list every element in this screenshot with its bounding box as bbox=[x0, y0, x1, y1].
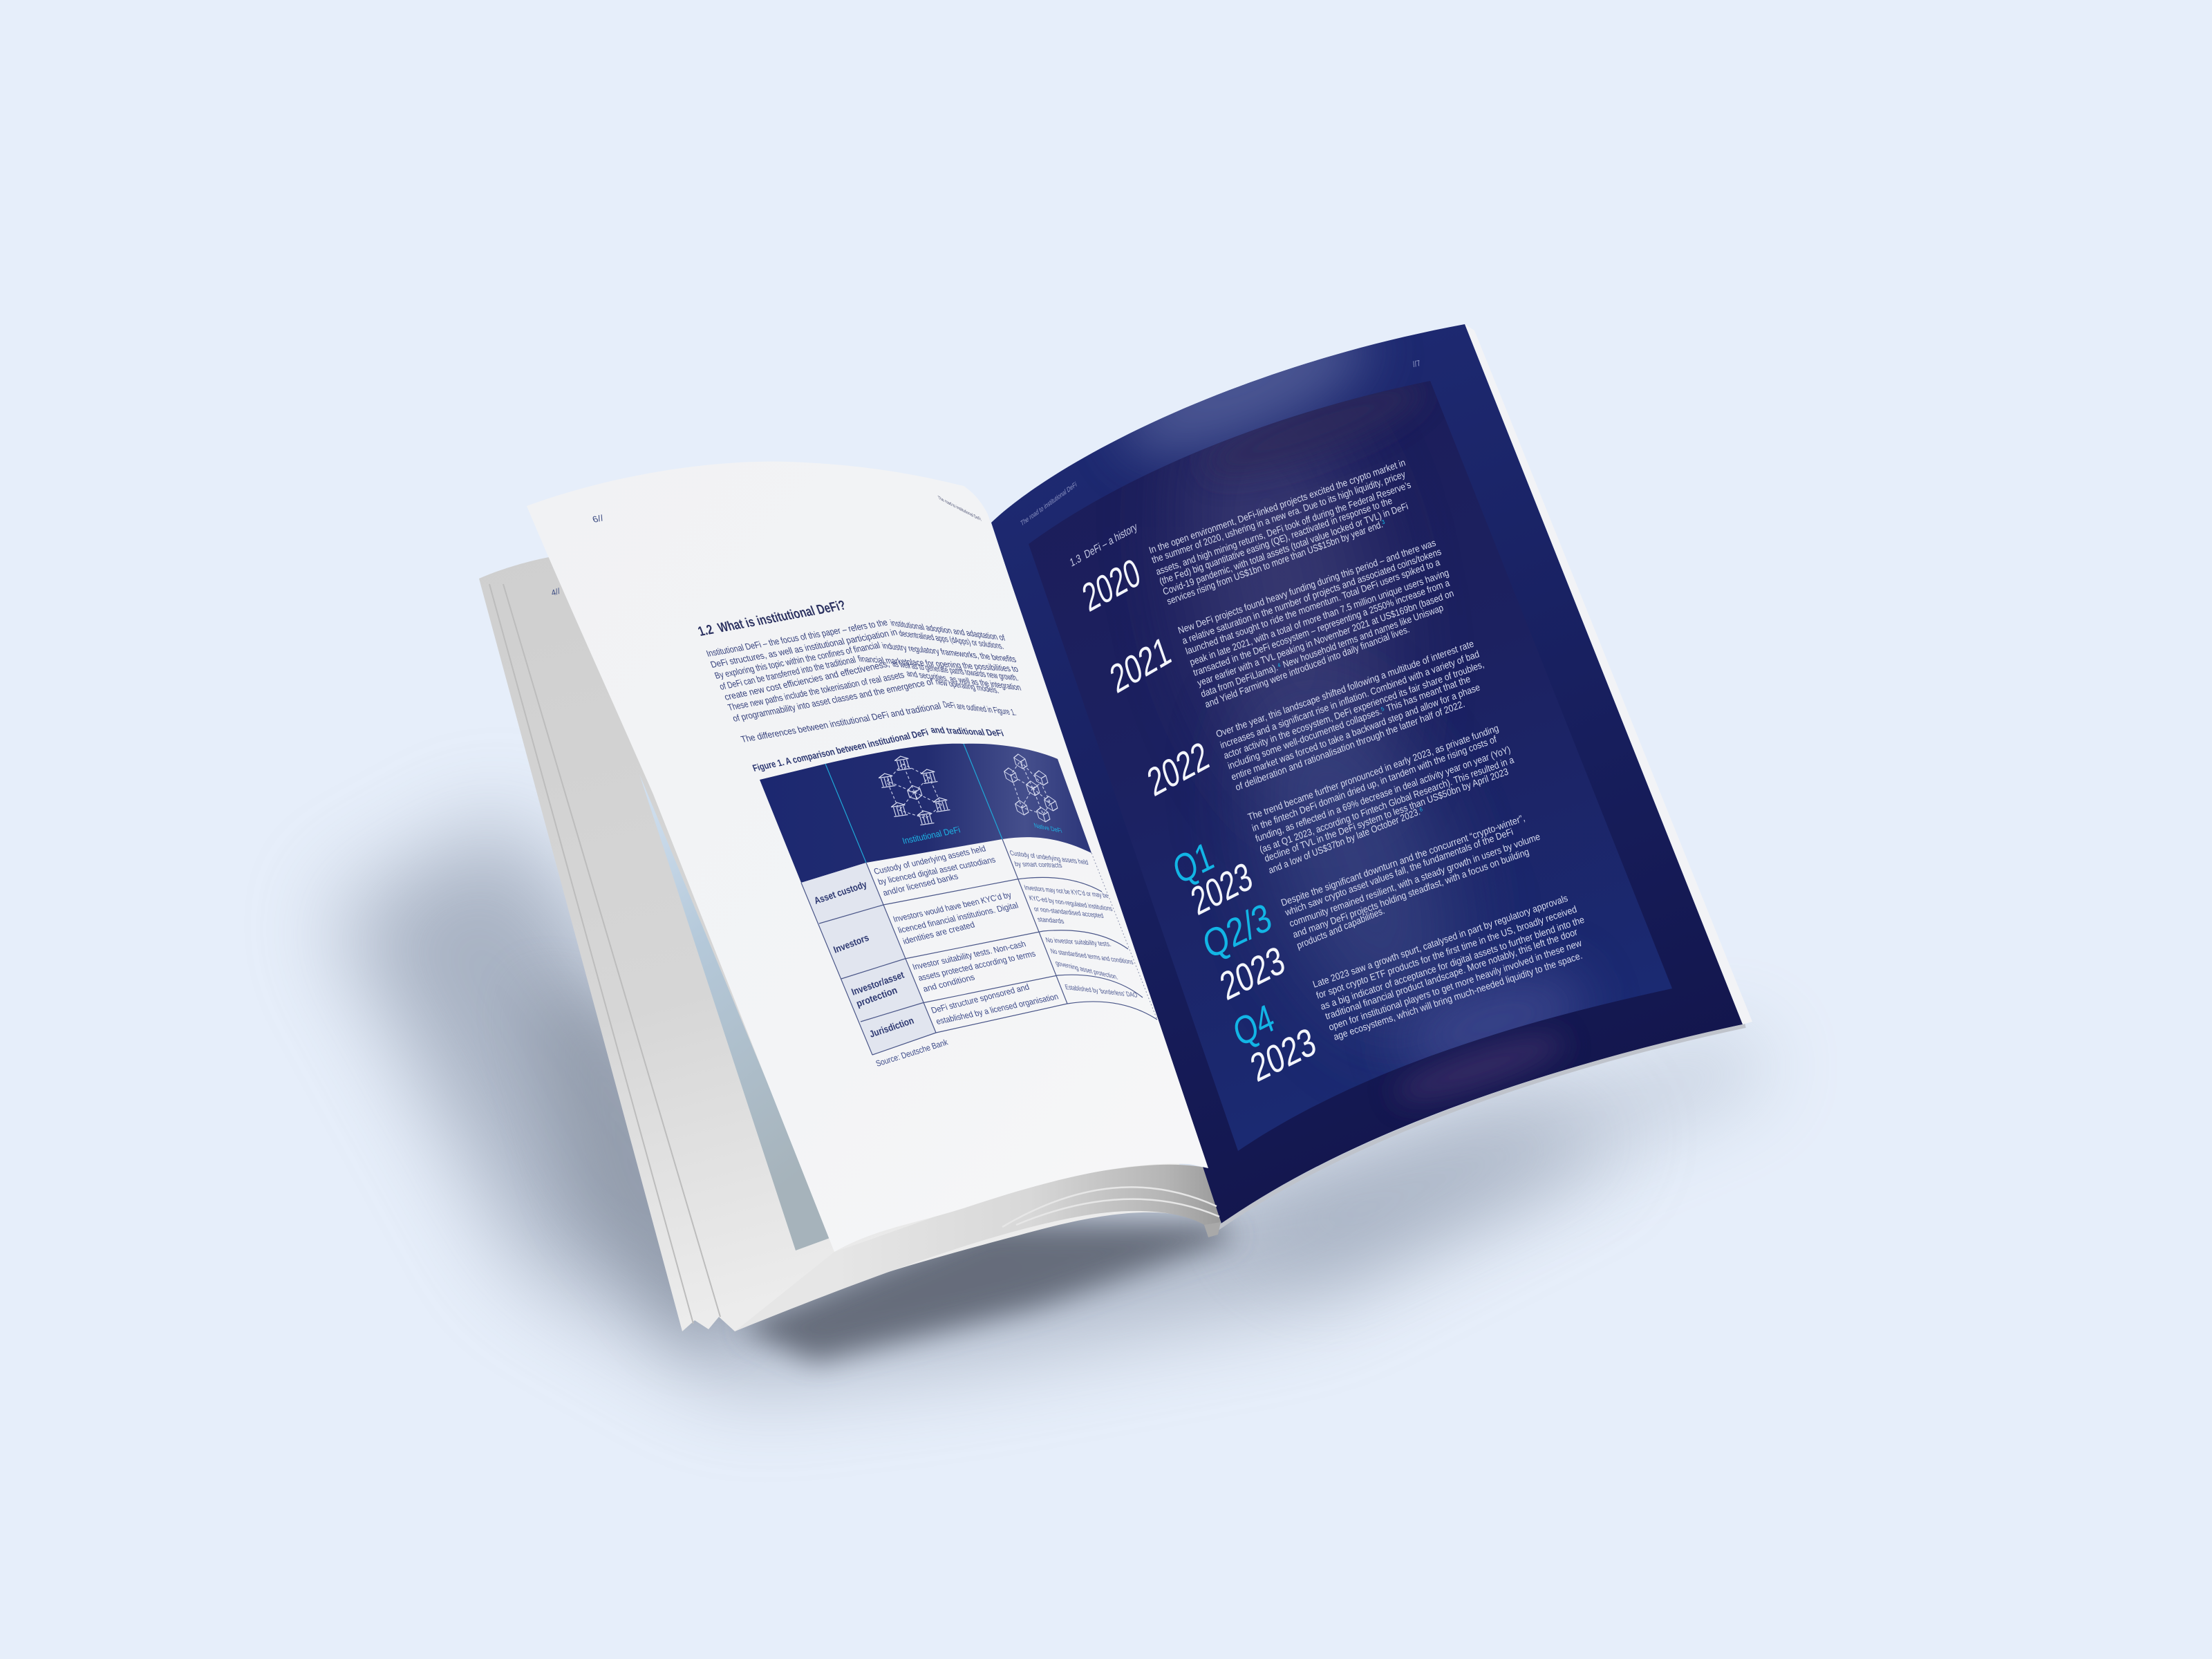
native DeFi column text: Investors may not be KYC’d or may be bbox=[1023, 883, 1109, 900]
gap showing blue-grey page bbox=[639, 774, 832, 1250]
paragraph: Q1 2023: (as at Q1 2023, according to Fintech Global Research). This resulted in a bbox=[1258, 755, 1516, 856]
paragraph: 2022: of deliberation and rationalisation through the latter half of 2022. bbox=[1234, 699, 1466, 794]
paragraph: 2021: launched that sought to ride the momentum. Total DeFi users spiked to a bbox=[1184, 557, 1442, 657]
paragraph: Q2/3 2023: and many DeFi projects holding steadfast, with a focus on building bbox=[1291, 847, 1530, 941]
paragraph: Q4 2023: Late 2023 saw a growth spurt, catalysed in part by regulatory approvals bbox=[1311, 893, 1569, 991]
table: comparison bbox=[760, 744, 1157, 1055]
body text: and securities, as well as the integration bbox=[905, 668, 1022, 693]
native DeFi column text: No standardised terms and conditions bbox=[1049, 947, 1134, 966]
native DeFi column text: No investor suitability tests. bbox=[1045, 937, 1112, 948]
source note: Source: Deutsche Bank bbox=[874, 1037, 950, 1069]
institutional DeFi column text: and/or licensed banks bbox=[881, 872, 959, 898]
page block under left page bbox=[735, 1165, 1225, 1331]
paragraph: 2021 bbox=[1177, 538, 1455, 711]
section heading: 1.2 What is institutional DeFi? bbox=[696, 598, 848, 639]
body text: financial marketplace for opening the possibilities to bbox=[856, 654, 1020, 674]
inner dark panel bbox=[1029, 381, 1672, 1151]
paragraph: 2022 bbox=[1215, 639, 1485, 794]
institutional DeFi column text: Investors would have been KYC’d by bbox=[892, 890, 1013, 924]
paragraph: 2022: increases and a significant rise in inflation. Combined with a variety of bad bbox=[1219, 649, 1481, 751]
icon: institutional DeFi network bbox=[878, 755, 950, 825]
year: 2021: 2021 bbox=[1105, 628, 1176, 702]
body text: decentralised apps (dApps) or solutions. bbox=[897, 628, 1005, 651]
paragraph: Q4 2023: open for institutional players to get more heavily involved in these new bbox=[1327, 938, 1584, 1033]
figure title: and traditional DeFi bbox=[928, 724, 1005, 738]
paragraph: 2020 bbox=[1147, 458, 1412, 608]
row labels: Investors bbox=[832, 932, 870, 956]
body text: institutional adoption and adaptation of bbox=[889, 618, 1006, 643]
running header: The road to institutional DeFi bbox=[1020, 480, 1078, 528]
running header: The road to institutional DeFi bbox=[937, 494, 982, 523]
paragraph: 2020: services rising from US$1bn to more than US$15bn by year end.³ bbox=[1165, 518, 1387, 608]
row labels: Jurisdiction bbox=[868, 1015, 915, 1040]
paragraph: 2020: In the open environment, DeFi-linked projects excited the crypto market in bbox=[1147, 458, 1407, 556]
column label: Institutional DeFi: Institutional DeFi bbox=[901, 825, 962, 846]
native DeFi column text: standards bbox=[1037, 916, 1065, 926]
page number: //7 bbox=[1412, 358, 1422, 369]
paragraph: Q2/3 2023: Despite the significant downturn and the concurrent “crypto-winter”, bbox=[1280, 813, 1526, 909]
paragraph: Q1 2023: in the fintech DeFi domain dried up, in tandem with the rising costs of bbox=[1250, 734, 1499, 834]
native DeFi column text bbox=[1009, 849, 1138, 1000]
year: Q4 2023: Q4 bbox=[1228, 995, 1280, 1056]
body text: of DeFi can be transferred into the traditional bbox=[718, 655, 857, 692]
paragraph: 2022: Over the year, this landscape shifted following a multitude of interest rate bbox=[1215, 639, 1475, 740]
institutional DeFi column text bbox=[872, 844, 1060, 1027]
institutional DeFi column text: licenced financial institutions. Digital bbox=[897, 901, 1020, 935]
institutional DeFi column text: and conditions bbox=[921, 973, 976, 994]
paragraph: Q1 2023: funding, as reflected in a 69% decrease in deal activity year on year (YoY) bbox=[1254, 744, 1512, 845]
row labels: Investor/asset bbox=[850, 970, 906, 998]
page number: 6// bbox=[591, 513, 605, 525]
panel: left page, institutional DeFi bbox=[527, 462, 1208, 1252]
row label column bbox=[801, 863, 936, 1055]
right page edge bbox=[1465, 324, 1752, 1024]
icon: native DeFi network bbox=[1003, 753, 1058, 823]
year: Q4 2023 bbox=[1228, 995, 1321, 1091]
body text: Institutional DeFi – the focus of this paper – refers to the bbox=[705, 617, 889, 659]
year: Q1 2023 bbox=[1168, 833, 1257, 924]
bottom cover edge bbox=[1217, 1026, 1745, 1229]
paragraph: 2021: transacted in the DeFi ecosystem – representing a 2550% increase from a bbox=[1192, 578, 1452, 679]
paragraph: Q1 2023: and a low of US$37bn by late October 2023.⁶ bbox=[1267, 805, 1425, 877]
paragraph: Q4 2023: traditional financial product landscape. More notably, this left the door bbox=[1324, 927, 1579, 1022]
paragraph: Q4 2023: age ecosystems, which will bring much-needed liquidity to the space. bbox=[1332, 950, 1584, 1043]
native DeFi column text: Established by ‘borderless’ DAO bbox=[1064, 983, 1138, 1000]
institutional DeFi column text: Investor suitability tests. Non-cash bbox=[911, 939, 1027, 972]
body text: of programmability into asset classes and the emergence of bbox=[731, 677, 935, 724]
paragraph: 2022: including some well-documented collapses.⁵ This has meant that the bbox=[1226, 674, 1472, 772]
paragraph: Q1 2023 bbox=[1246, 723, 1516, 877]
section heading: 1.3 DeFi – a history bbox=[1068, 520, 1138, 570]
paragraph: 2021: year earlier with a TVL peaking in November 2021 at US$169bn (based on bbox=[1196, 588, 1455, 689]
body text: These new paths include the tokenisation of real assets bbox=[727, 670, 906, 713]
paragraph: 2022: actor activity in the ecosystem, DeFi experienced its fair share of troubles, bbox=[1222, 659, 1485, 762]
paragraph: 2021: peak in late 2021, with a total of more than 7.5 million unique users having bbox=[1188, 568, 1450, 668]
body text: DeFi are outlined in Figure 1. bbox=[941, 700, 1018, 718]
native DeFi column text: governing asset protection. bbox=[1054, 959, 1119, 982]
native DeFi column text: by smart contracts bbox=[1014, 861, 1063, 870]
paragraph: 2020: assets, and high mining returns, DeFi took off during the Federal Reserve’s bbox=[1154, 480, 1412, 578]
panel: right page, DeFi history bbox=[991, 293, 1745, 1229]
spine foot bbox=[1204, 1222, 1221, 1237]
body text: new operating models. bbox=[934, 677, 1000, 695]
paragraph: Q2/3 2023: products and capabilities. bbox=[1295, 906, 1386, 952]
figure title: Figure 1. A comparison between institutional DeFi bbox=[751, 727, 930, 774]
body text: The differences between institutional DeFi and traditional bbox=[740, 701, 942, 744]
paragraph: Q2/3 2023 bbox=[1280, 813, 1541, 952]
institutional DeFi column text: by licenced digital asset custodians bbox=[877, 855, 997, 887]
institutional DeFi column text: Custody of underlying assets held bbox=[872, 844, 987, 877]
row labels: Asset custody bbox=[813, 879, 868, 907]
paragraph: Q4 2023 bbox=[1311, 893, 1586, 1043]
institutional DeFi column text: identities are created bbox=[901, 920, 976, 946]
paragraph: Q2/3 2023: community remained resilient, with a steady growth in users by volume bbox=[1288, 832, 1541, 930]
year: Q2/3 2023 bbox=[1197, 894, 1290, 1009]
paragraph: Q4 2023: for spot crypto ETF products for the first time in the US, broadly received bbox=[1315, 904, 1578, 1002]
year: Q2/3 2023: 2023 bbox=[1215, 937, 1290, 1009]
native DeFi column text: KYC-ed by non-regulated institutions bbox=[1028, 894, 1114, 913]
paragraph: 2020: (the Fed) big quantitative easing (QE), reactivated in response to the bbox=[1158, 496, 1394, 588]
row labels bbox=[813, 879, 915, 1040]
native DeFi column text: or non-standardised accepted bbox=[1033, 905, 1105, 920]
paragraph: Q4 2023: as a big indicator of acceptance for digital assets to further blend into the bbox=[1319, 915, 1586, 1013]
native DeFi column text: Custody of underlying assets held bbox=[1009, 849, 1089, 867]
institutional DeFi column text: established by a licensed organisation bbox=[935, 992, 1060, 1027]
year: 2022: 2022 bbox=[1142, 733, 1214, 805]
page number on back page: 4// bbox=[550, 586, 561, 598]
paragraph: 2021: data from DeFiLlama).⁴ New household terms and names like Uniswap bbox=[1199, 603, 1445, 700]
body text bbox=[705, 617, 1022, 744]
book shadow bbox=[332, 816, 1770, 1382]
paragraph: 2020: Covid-19 pandemic, with total assets (total value locked or TVL) in DeFi bbox=[1161, 501, 1409, 598]
institutional DeFi column text: DeFi structure sponsored and bbox=[930, 982, 1031, 1015]
year: Q2/3 2023: Q2/3 bbox=[1197, 894, 1277, 968]
back pages of the book bbox=[479, 556, 1211, 1331]
body text: DeFi structures, as well as institutional participation in bbox=[709, 627, 899, 670]
year: Q4 2023: 2023 bbox=[1245, 1019, 1321, 1091]
curled page edges at the spine bbox=[1002, 1187, 1219, 1227]
body text: industry regulatory frameworks, the benefits bbox=[881, 641, 1018, 664]
year: Q1 2023: 2023 bbox=[1185, 854, 1257, 924]
body text: By exploring this topic within the confines of financial bbox=[713, 640, 881, 681]
year: Q1 2023: Q1 bbox=[1168, 833, 1219, 893]
year: 2020: 2020 bbox=[1077, 550, 1145, 620]
body text: create new cost efficiencies and effectiveness, bbox=[723, 659, 891, 702]
paragraph: 2022: entire market was forced to take a backward step and allow for a phase bbox=[1230, 682, 1481, 783]
paragraph: 2021: New DeFi projects found heavy funding during this period – and there was bbox=[1177, 538, 1437, 637]
paragraph: Q1 2023: The trend became further pronounced in early 2023, as private funding bbox=[1246, 723, 1500, 823]
row labels: protection bbox=[855, 985, 899, 1010]
body text: as well as to generate paths towards new growth. bbox=[890, 659, 1020, 683]
institutional DeFi column text: assets protected according to terms bbox=[917, 949, 1037, 983]
paragraph: Q1 2023: decline of TVL in the DeFi system to less than US$50bn by April 2023 bbox=[1263, 767, 1510, 865]
column label: Native DeFi: Native DeFi bbox=[1033, 822, 1063, 835]
table header band bbox=[760, 744, 1091, 883]
paragraph: 2021: and Yield Farming were introduced into daily financial lives. bbox=[1203, 624, 1411, 711]
paragraph: 2020: the summer of 2020, ushering in a new era. Due to its high liquidity, pricey bbox=[1150, 469, 1407, 566]
paragraph: Q2/3 2023: which saw crypto asset values fall, the fundamentals of the DeFi bbox=[1284, 827, 1515, 919]
paragraph: 2021: a relative saturation in the number of projects and associated coins/tokens bbox=[1181, 547, 1443, 647]
